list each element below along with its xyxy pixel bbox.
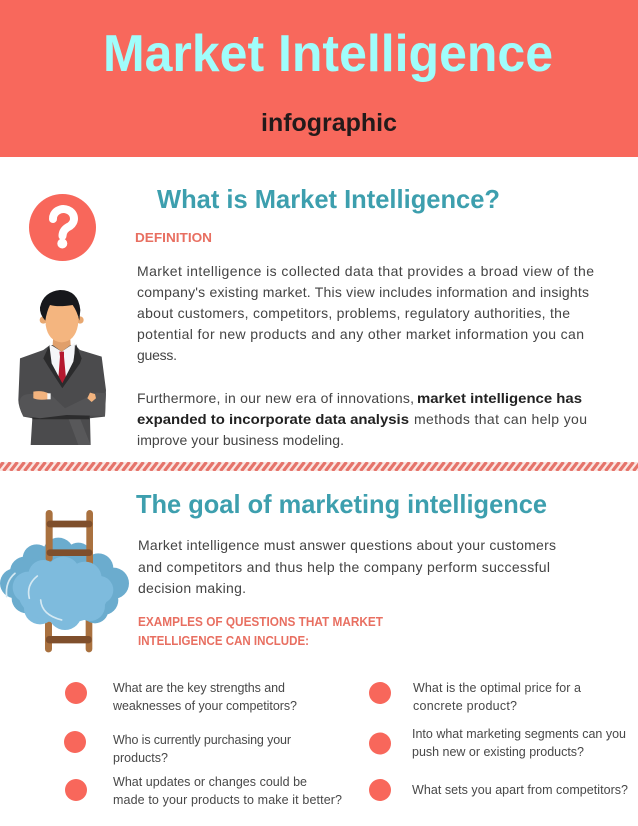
text block: definition: guess.: [137, 347, 177, 363]
text block: goal: [138, 537, 556, 596]
heading: what is market intelligence: What is Market Intelligence?: [157, 184, 500, 214]
bullet: updates or changes: [65, 775, 342, 807]
illustration: ladder through cloud: [0, 510, 129, 652]
bullet: optimal price: What is the optimal price for a: [413, 681, 581, 695]
text block: furthermore: expanded to incorporate data analysis: [137, 411, 409, 427]
text block: goal: and competitors and thus help the company perform successful: [138, 559, 550, 575]
text block: definition: potential for new products and any other market information you can: [137, 326, 584, 342]
text block: furthermore: Furthermore, in our new era of innovations,: [137, 390, 414, 406]
text block: goal: decision making.: [138, 580, 246, 596]
striped divider: [0, 462, 638, 471]
text block: definition: Market intelligence is collected data that provides a broad view of the: [137, 263, 594, 279]
bullet: marketing segments: push new or existing products?: [412, 745, 584, 759]
bullet: sets you apart: What sets you apart from competitors?: [412, 783, 628, 797]
bullet: updates or changes: What updates or changes could be: [113, 775, 307, 789]
bullet: who is purchasing: products?: [113, 751, 168, 765]
text block: definition: about customers, competitors, problems, regulatory authorities, the: [137, 305, 570, 321]
label: examples of questions: EXAMPLES OF QUESTIONS THAT MARKET: [138, 614, 383, 629]
bullet: marketing segments: [369, 727, 626, 759]
title: Market Intelligence: [103, 25, 553, 83]
icon: question mark: [29, 194, 96, 261]
label: definition: DEFINITION: [135, 230, 212, 245]
bullet: marketing segments: Into what marketing segments can you: [412, 727, 626, 741]
illustration: businessman with crossed arms: [18, 290, 106, 445]
text block: furthermore: methods that can help you: [414, 411, 587, 427]
text block: definition: company's existing market. This view includes information and insights: [137, 284, 589, 300]
bullet: who is purchasing: [64, 731, 291, 765]
bullet: strengths and weaknesses: [65, 681, 297, 713]
text block: furthermore: market intelligence has: [417, 390, 582, 406]
bullet: optimal price: [369, 681, 581, 713]
text block: furthermore: improve your business modeling.: [137, 432, 344, 448]
text block: definition: [137, 263, 594, 363]
bullet: who is purchasing: Who is currently purchasing your: [113, 733, 291, 747]
label: examples of questions: INTELLIGENCE CAN INCLUDE:: [138, 633, 309, 648]
text block: furthermore: [137, 390, 587, 448]
bullet: sets you apart: [369, 779, 628, 801]
subtitle: infographic: [261, 109, 397, 137]
bullet: strengths and weaknesses: weaknesses of your competitors?: [112, 699, 297, 713]
text block: goal: Market intelligence must answer questions about your customers: [138, 537, 556, 553]
header banner: [0, 0, 638, 157]
bullet: optimal price: concrete product?: [413, 699, 517, 713]
bullet: updates or changes: made to your products to make it better?: [113, 793, 342, 807]
heading: the goal of marketing intelligence: The goal of marketing intelligence: [136, 489, 547, 519]
bullet: strengths and weaknesses: What are the key strengths and: [113, 681, 285, 695]
label: examples of questions: [138, 614, 383, 648]
